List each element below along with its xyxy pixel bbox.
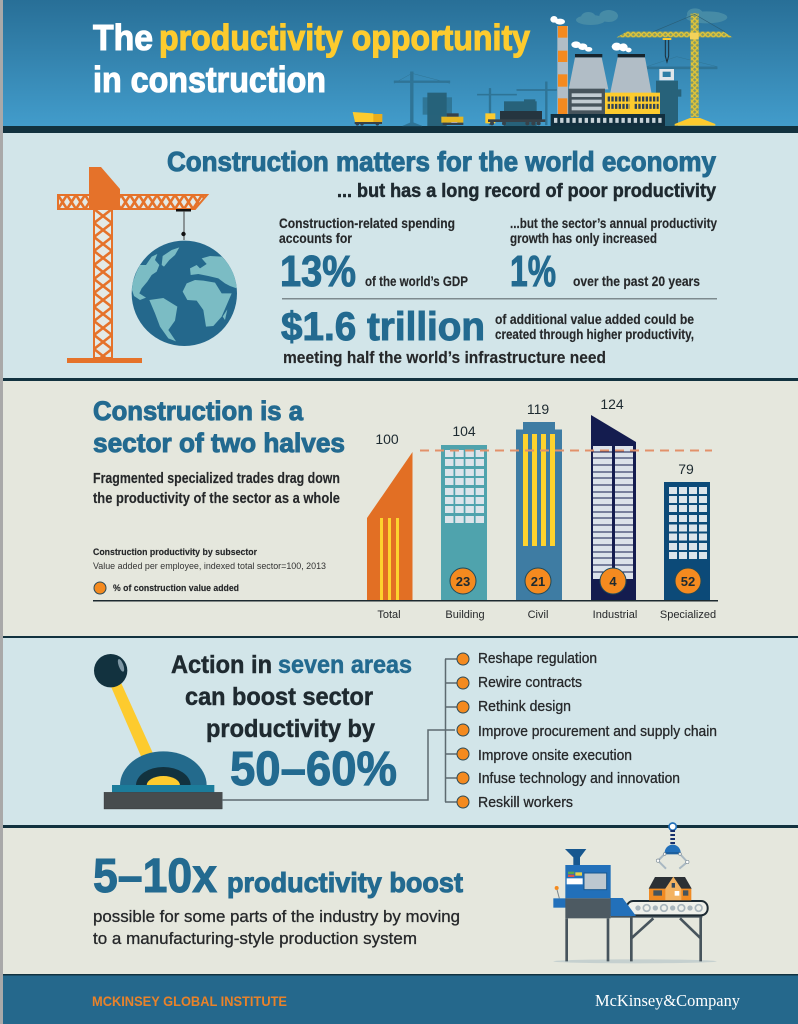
bar: specialized — [664, 482, 710, 600]
bar: total — [367, 452, 412, 600]
subheading: ... but has a long record of poor productivity — [337, 181, 716, 202]
stat: 13% of GDP — [279, 216, 468, 296]
list: seven areas: Reshape regulation — [478, 650, 597, 667]
list: seven areas: Improve procurement and supply chain — [478, 723, 717, 740]
description: possible for some parts of the industry by moving — [93, 907, 460, 926]
footer label: MCKINSEY GLOBAL INSTITUTE — [92, 993, 287, 1009]
title: in construction — [93, 59, 326, 100]
stat: 1% growth: ...but the sector’s annual productivity — [510, 216, 717, 231]
value circles — [450, 568, 701, 594]
heading: productivity boost — [227, 867, 463, 898]
bar values: 79 — [678, 461, 694, 477]
chart note: Construction productivity by subsector — [93, 547, 257, 558]
heading: Construction matters for the world economy — [167, 146, 716, 177]
trucks — [353, 112, 382, 126]
stat: 13% of GDP: of the world’s GDP — [365, 274, 468, 289]
stat: 1% growth — [510, 216, 717, 296]
value circles: 21 — [531, 574, 545, 589]
list: seven areas: Reskill workers — [478, 794, 573, 811]
panel: seven areas — [3, 638, 798, 825]
chart note: Value added per employee, indexed total sector=100, 2013 — [93, 561, 326, 572]
bar chart: productivity by subsector — [93, 396, 718, 621]
bar values: 104 — [452, 423, 476, 439]
title: The — [93, 17, 153, 58]
bar values: 100 — [375, 431, 399, 447]
heading — [93, 850, 463, 903]
stat: $1.6 trillion — [281, 305, 694, 367]
bar values: 124 — [600, 396, 624, 412]
axis labels: Industrial — [593, 609, 637, 621]
stat: $1.6 trillion: created through higher productivity, — [495, 327, 694, 342]
heading: Action in — [171, 651, 272, 679]
heading — [93, 396, 345, 458]
axis labels — [377, 609, 716, 621]
bar: industrial — [591, 415, 636, 600]
icon: crane lifting globe — [58, 167, 237, 363]
description: to a manufacturing-style production system — [93, 929, 417, 948]
panel: header — [3, 0, 798, 133]
stat: 13% of GDP: 13% — [280, 247, 356, 296]
logo text: McKinsey&Company — [595, 991, 740, 1010]
icon: lever — [94, 654, 222, 809]
stat: 13% of GDP: Construction-related spending — [279, 216, 455, 231]
legend: % of construction value added — [113, 583, 239, 594]
list: seven areas — [457, 650, 717, 811]
illustration: industrial skyline — [353, 8, 733, 126]
axis labels: Building — [445, 609, 485, 621]
description: Fragmented specialized trades drag down — [93, 470, 340, 487]
description — [93, 907, 460, 948]
panel: two halves — [3, 381, 798, 636]
stat: 1% growth: growth has only increased — [510, 231, 657, 246]
value circles: 23 — [456, 574, 470, 589]
bar values: 119 — [527, 401, 549, 417]
heading: Construction is a — [93, 396, 304, 426]
description: the productivity of the sector as a whole — [93, 490, 340, 507]
value circles: 52 — [681, 574, 695, 589]
heading: 5–10x — [93, 850, 217, 903]
stat: 1% growth: over the past 20 years — [573, 274, 700, 289]
panel: footer — [3, 976, 798, 1024]
connector — [222, 659, 458, 802]
axis labels: Specialized — [660, 609, 716, 621]
list: seven areas: Rewire contracts — [478, 674, 582, 691]
list: seven areas: Infuse technology and innovation — [478, 770, 680, 787]
illustration: factory line — [553, 823, 717, 963]
panel: productivity boost — [3, 823, 798, 975]
bar: building — [441, 445, 487, 600]
list: seven areas: Rethink design — [478, 698, 571, 715]
heading — [171, 651, 412, 796]
bar values — [375, 396, 694, 477]
value circles: 4 — [609, 574, 617, 589]
heading: seven areas — [278, 651, 412, 679]
bar: civil — [516, 422, 562, 600]
stat: $1.6 trillion: $1.6 trillion — [281, 305, 485, 349]
description — [93, 470, 340, 507]
chart note — [93, 547, 326, 572]
axis labels: Total — [377, 609, 401, 621]
heading: can boost sector — [185, 683, 373, 711]
title — [93, 17, 530, 100]
heading: sector of two halves — [93, 428, 345, 458]
heading: productivity by — [206, 715, 375, 743]
axis labels: Civil — [528, 609, 548, 621]
list: seven areas: Improve onsite execution — [478, 747, 632, 764]
stat: 13% of GDP: accounts for — [279, 231, 353, 246]
stat: $1.6 trillion: meeting half the world’s infrastructure need — [283, 348, 606, 367]
panel: construction matters — [3, 133, 798, 378]
markers — [457, 653, 469, 808]
heading: 50–60% — [230, 743, 397, 796]
stat: $1.6 trillion: of additional value added could be — [495, 312, 694, 327]
title: productivity opportunity — [159, 17, 530, 58]
stat: 1% growth: 1% — [510, 247, 556, 296]
